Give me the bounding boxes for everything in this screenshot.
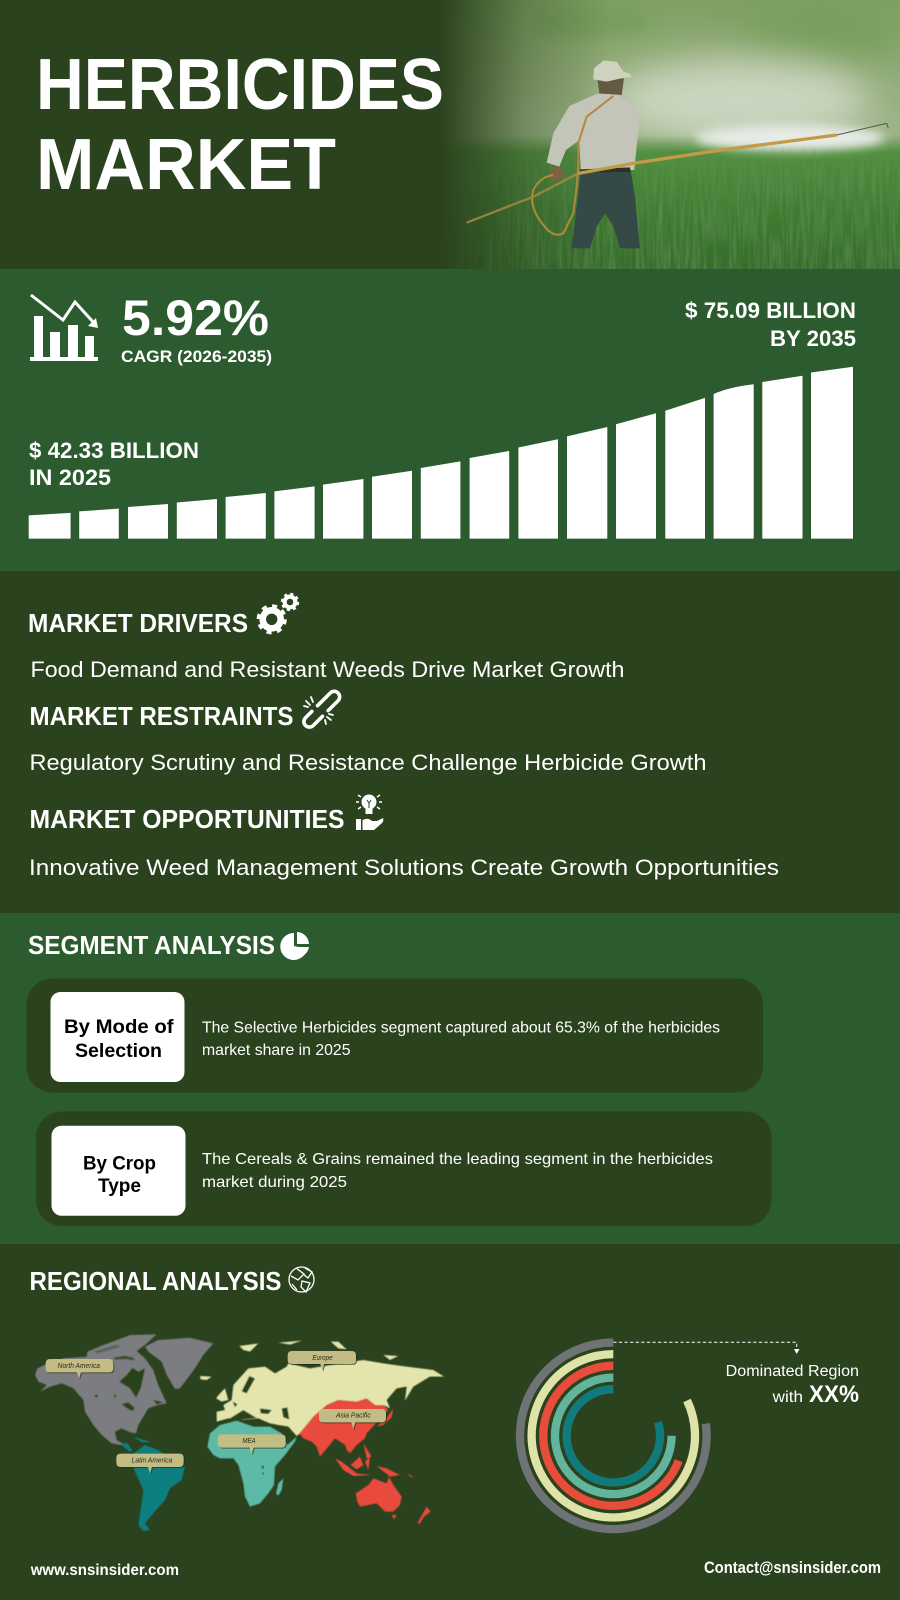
text: drivers summary: Food Demand and Resistant Weeds Drive Market Growth: [30, 657, 624, 682]
text: crop type description: The Cereals & Grains remained the leading segment in the herbicides: [202, 1151, 713, 1168]
label: by crop type: Type: [98, 1176, 141, 1197]
text: restraints summary: Regulatory Scrutiny and Resistance Challenge Herbicide Growth: [30, 750, 706, 775]
panel: segment analysis: [0, 913, 900, 1244]
illustration: farmer figure: [467, 61, 888, 248]
shirt: [547, 94, 639, 170]
chart: radial bars by region: [520, 1342, 707, 1529]
footer: website: www.snsinsider.com: [30, 1562, 179, 1579]
icon: broken chain link: [302, 689, 342, 729]
callout: middle east and africa: MEA: [242, 1438, 256, 1445]
title: [36, 45, 444, 205]
stat: CAGR: CAGR (2026-2035): [121, 347, 272, 366]
hudson bay and arctic channels: [93, 1344, 163, 1411]
stat: 2025 value: $ 42.33 BILLION: [29, 438, 199, 463]
title: HERBICIDES: [36, 45, 444, 125]
hand: [550, 167, 563, 181]
bar chart: market growth: [29, 367, 853, 539]
callout: europe: [288, 1351, 357, 1372]
text: mode of selection description: [202, 1020, 720, 1059]
callout: europe: Europe: [312, 1355, 333, 1362]
text: crop type description: [202, 1151, 713, 1191]
heading: market drivers: MARKET DRIVERS: [28, 608, 248, 638]
nozzle boom: [837, 123, 888, 135]
text: crop type description: market during 2025: [202, 1174, 347, 1191]
stat: 2035 value: $ 75.09 BILLION: [685, 298, 856, 323]
text: mode of selection description: market share in 2025: [202, 1042, 351, 1059]
label: by mode of selection: Selection: [75, 1041, 162, 1062]
callout: dominated region: Dominated Region: [726, 1363, 859, 1380]
region: asia pacific: [299, 1398, 431, 1523]
african lakes: [261, 1466, 264, 1475]
heading: segment analysis: SEGMENT ANALYSIS: [28, 930, 275, 960]
trousers: [572, 171, 640, 248]
icon: light bulb in hand: [356, 794, 383, 830]
hose: [532, 96, 613, 235]
stat: CAGR: 5.92%: [122, 290, 269, 346]
icon: pie chart: [280, 932, 309, 960]
label: by crop type: By Crop: [83, 1154, 156, 1174]
callout: asia pacific: Asia Pacific: [335, 1413, 371, 1420]
region: middle east and africa: [207, 1421, 297, 1507]
callout: dominated region: XX%: [809, 1381, 859, 1408]
callout: north america: [46, 1359, 114, 1380]
card: by crop type: [36, 1112, 772, 1226]
heading: regional analysis: REGIONAL ANALYSIS: [30, 1266, 282, 1296]
icon: falling trend bars: [30, 295, 98, 361]
label: by crop type: [52, 1126, 186, 1216]
stat: 2035 value: [685, 298, 856, 351]
stat: 2035 value: BY 2035: [770, 326, 856, 351]
neck and head: [597, 78, 624, 95]
card: by mode of selection: [26, 978, 763, 1092]
stat: 2025 value: IN 2025: [29, 465, 111, 490]
callout: latin america: Latin America: [132, 1458, 172, 1465]
heading: market restraints: MARKET RESTRAINTS: [30, 701, 294, 731]
icon: gears: [258, 594, 298, 633]
panel: regional analysis: [0, 1244, 900, 1600]
spray pole: [467, 173, 578, 223]
map west: americas: [35, 1334, 213, 1531]
map east: old world: [200, 1341, 444, 1523]
callout: north america: North America: [58, 1363, 100, 1370]
map: world regions: [35, 1334, 444, 1531]
region: north america: [35, 1334, 213, 1445]
region: europe and russia: [200, 1341, 444, 1436]
callout: middle east and africa: [218, 1434, 287, 1455]
title: MARKET: [36, 125, 336, 205]
label: by mode of selection: [50, 992, 184, 1082]
belt: [580, 167, 631, 173]
callout: latin america: [116, 1454, 185, 1475]
panel: market size growth: [0, 269, 900, 571]
footer: contact email: Contact@snsinsider.com: [704, 1559, 881, 1577]
callout: dominated region: with: [772, 1389, 803, 1406]
cap: [593, 61, 631, 82]
text: mode of selection description: The Selective Herbicides segment captured about 65.3% of the herbicides: [202, 1020, 720, 1036]
panel: hero header: [36, 0, 900, 269]
label: by mode of selection: By Mode of: [64, 1017, 174, 1038]
icon: globe: [289, 1267, 314, 1292]
panel: market dynamics: [0, 571, 900, 913]
stat: CAGR: [121, 290, 272, 366]
fade: photo into dark panel: [440, 0, 592, 269]
text: opportunities summary: Innovative Weed Management Solutions Create Growth Opportunities: [29, 855, 779, 880]
inland seas: [229, 1376, 289, 1420]
callout: asia pacific: [319, 1409, 387, 1430]
map labels: [46, 1351, 387, 1475]
callout: dominated region: [726, 1363, 859, 1408]
photo: farmer spraying field: [440, 0, 900, 269]
heading: market opportunities: MARKET OPPORTUNITIES: [30, 804, 344, 834]
region: latin america: [121, 1437, 185, 1531]
stat: 2025 value: [29, 438, 199, 490]
arrow: dashed leader to callout: [613, 1342, 800, 1354]
